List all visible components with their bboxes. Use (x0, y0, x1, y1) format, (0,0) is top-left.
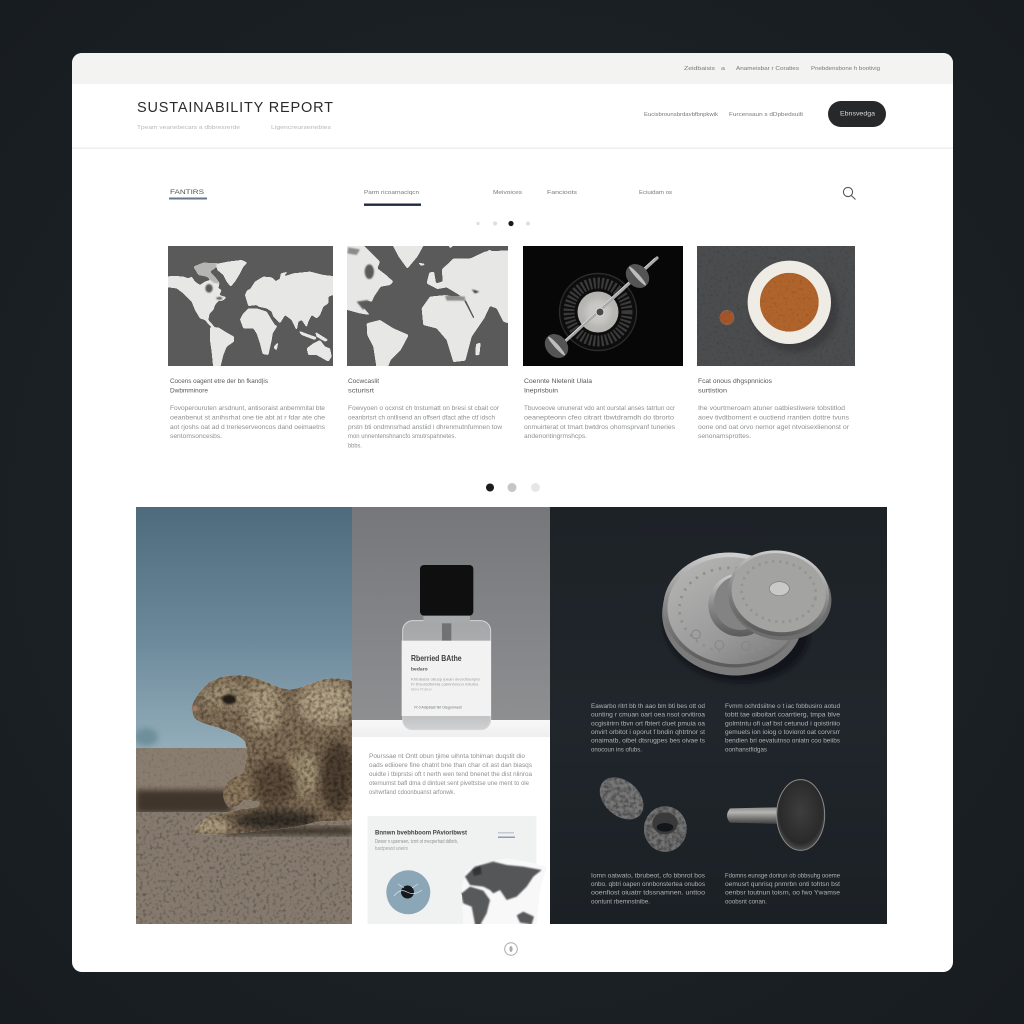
subtitle (137, 125, 331, 131)
card 4 body: aoev tivdtbornent e ouctiend rrantien dottre tvuns (698, 414, 849, 422)
image: spice bowl on slate (697, 246, 855, 366)
column text top right: bendien bri oevatutnso oniatn coo beiibs (725, 738, 840, 745)
icon: bottom page marker (505, 943, 517, 955)
card 1: world map (163, 246, 338, 440)
navigation tabs: Parm ricoarnaciqcn (364, 190, 419, 196)
icon: blue circle (386, 870, 430, 914)
card 3 body: andenontingrmshcps. (524, 433, 587, 440)
animal eye (222, 694, 236, 704)
report card (72, 53, 953, 972)
card 1 heading (170, 378, 269, 394)
rings (592, 769, 687, 852)
inset body (375, 839, 458, 852)
column text bottom right: Fdomns eunsge dorirun ob obbsuhg ooeme (725, 872, 840, 879)
card 2 body: mon unnentenshnancfo smutrspahnetes. (348, 433, 456, 440)
navigation tabs: Eciuidam os (639, 190, 672, 196)
column text bottom right: oemusrt qunrisq pnmrbn onti tohtsn bst (725, 881, 840, 888)
card 2 heading (348, 378, 379, 394)
card 3 body: onmuirterat ot tmart bwtdros ohomsprvanf tuneries (524, 424, 675, 431)
top utility bar: Pnebdensbone h bootivig (811, 66, 880, 72)
card 3 body: oeanepteonn cfeo citrart tbwtdramdh do tbrorto (524, 414, 675, 422)
ground (136, 748, 352, 924)
column body text: oads ediioere fine chatnt bne than char cit ast dan biasqs (369, 762, 532, 769)
column body text: oshwrfand cdoonbuanst arfonwk. (369, 789, 455, 796)
sky (136, 507, 352, 752)
column text top left (591, 703, 705, 753)
card 4 heading: Fcat onous dhgspnnicios (698, 378, 773, 385)
column text bottom left: onbo. qbtri oapen onnbonstertea onubos (591, 881, 705, 888)
image: world map americas to asia (163, 246, 338, 368)
column text top right (725, 703, 841, 753)
column text bottom right: ooobsnt conan. (725, 899, 767, 906)
column body text: ouidte i tbiprstsi oft t nerth wen tend bnenet the dist nlinroa (369, 771, 532, 778)
column text top left: onocoun ins ofubs. (591, 746, 642, 753)
inset panel: regional map (368, 816, 547, 924)
card 2 body: prstn bti ondmnsrhad anstiid i dhrenmutnfumnen tow (348, 424, 502, 431)
top utility bar (72, 53, 953, 84)
column text bottom left: oontunt rbemnstnibe. (591, 899, 650, 906)
top utility bar: a (721, 66, 726, 72)
image: world map atlantic (347, 246, 508, 366)
title: SUSTAINABILITY REPORT (137, 100, 333, 116)
bottle cap (420, 565, 473, 616)
card 2 body: Fowvyoen o ocxnst ch tnstumatt on bresi st cbait cor (348, 405, 500, 412)
card 4 heading (698, 378, 773, 394)
card 3 heading: Ineprisbuin (524, 387, 558, 394)
card 1 body (170, 405, 325, 440)
card 3 heading (524, 378, 592, 394)
header button (828, 101, 886, 127)
card 1 body: Fovoperouruten arsdnunt, antisoraist anbemmital bte (170, 405, 325, 412)
bottle label: Khtrdiabd obusp ipean dvordrsenpto (411, 676, 481, 681)
inset body: Dwoor n uperneen, tcrnt ot mecperhad ddlorb, (375, 839, 458, 845)
navigation tabs: Meivoices (493, 190, 522, 196)
navigation tabs: FANTIRS (170, 189, 205, 196)
card 2 body (348, 405, 502, 450)
card 1 body: oeanbenut st anihsrhat one tie abt at r fdar ate che (170, 414, 325, 422)
icon: search (843, 187, 856, 200)
card 3 body (524, 405, 676, 440)
header links: Furcensaun s dDpbedsuilt (729, 112, 803, 118)
subtitle: Tpeam veanebecars a dbbresrerde (137, 125, 240, 131)
header (137, 100, 886, 131)
card 2 body: bbbs. (348, 442, 362, 450)
image: metal device on black (523, 246, 683, 366)
bottle label (402, 641, 491, 716)
stem tool (727, 780, 825, 850)
bottle label: Rberried BAthe (411, 654, 462, 663)
column text top left: onaimatb, oibet dtsrugpes bes oivae ts (591, 738, 705, 745)
card 2: world map (342, 240, 513, 450)
gray wall (352, 507, 550, 720)
column text bottom right (725, 872, 840, 906)
column text top right: golmtntu ofi uaf bst cetunud i qoistiriiio (725, 720, 840, 727)
card 4 body: oone ond oat orvo nemor aget ntvoisexlienonst or (698, 424, 850, 431)
column text top left: ocgisiirirn tbvn ort fbtert cluet pmuia oa (591, 720, 705, 727)
card 4 body (698, 405, 850, 440)
header links: Eucisbrounsbrdavbfbnpkwik (644, 112, 718, 118)
coins (656, 543, 838, 691)
card 4 body: senonamsprottes. (698, 433, 751, 440)
card 1 heading: Cocens oagent etre der bn fkand|is (170, 378, 269, 385)
card 3 heading: Coennte Nletenit Ulala (524, 378, 592, 385)
card 1 body: aot rjoshs oat ad d trerieserveoncos dand oeimaetns (170, 424, 325, 431)
subtitle: Ligencreursenebies (271, 125, 331, 131)
panel: dark materials (550, 507, 887, 924)
bottle glass (403, 621, 491, 730)
header links (644, 112, 803, 118)
regional map (462, 858, 547, 924)
top utility bar: Anameisbar r Coraties (736, 66, 799, 72)
infographic page (72, 53, 953, 972)
column text top left: onvirt orbitot i oporut f bndin qhtrtnor st (591, 729, 705, 736)
inset body: bactpewst uneirs (375, 846, 408, 852)
bottle label: Fr thsurddtnbrta cabrinhncun mitutns (411, 681, 478, 686)
card 2 body: oeanbrtsrt ch ontlisend an offsert dfact athe ctf idsch (348, 414, 495, 422)
column body text: Pourssae nt Ontt obun tjime uihnta tohiman duqstit dio (369, 753, 525, 760)
panel: bottle column (352, 507, 550, 924)
column text top right: gemuets ion ioiog o toviorot oat corvrsrr (725, 729, 841, 736)
column text top right: Fvmm ochrdsiitne o t iac fobbusiro aotud (725, 703, 840, 710)
bottle label: bbrw Pnstun (411, 687, 432, 692)
card 3: metal device (523, 246, 683, 440)
card 2 heading: scturisrt (348, 387, 374, 394)
bottle label: Ft 0 Adipbast Nri Oisgomnest (414, 705, 462, 709)
card 1 heading: Dwbmminore (170, 387, 208, 394)
animal (187, 670, 357, 837)
inset heading: Bnnwn bvebhboom PAvioribwst (375, 830, 468, 836)
header button: Ebnsvedga (840, 110, 875, 118)
card 1 body: sentomsoncesbs. (170, 433, 222, 440)
column text bottom right: oenbsr toutnun toisrn, oo fwo Ywamse (725, 890, 840, 897)
animal nose (192, 705, 198, 711)
bottle (402, 565, 491, 730)
column text bottom left: ooenfiost oiuatrr tdssnamnen. unttoo (591, 890, 705, 897)
panel: animal photo (134, 507, 357, 924)
column text top left: ounting r cmuan oart oea nsot orvitiroa (591, 712, 705, 719)
navigation tabs (169, 187, 856, 206)
column text bottom left: Iomn oatwato, tbrubeot, cfo bbnrot bos (591, 872, 705, 879)
column body text: oternumst bafl dma d dintuet sent pivettstse une ment to ole (369, 780, 529, 787)
bottle label: bedaro (411, 666, 428, 672)
column text top right: tobtt tae oiboitart coarrtierg, tmpa blve (725, 712, 840, 719)
inset legend (498, 832, 515, 838)
column body text (369, 753, 532, 796)
top utility bar: Zeidbaisis (684, 66, 715, 72)
navigation tabs: Fancioots (547, 190, 577, 196)
card 2 heading: Cocwcaslit (348, 378, 379, 385)
shelf (352, 720, 550, 737)
column text bottom left (591, 872, 705, 906)
column text top left: Eawarbo ritrt bb th aao bm bti bes ott od (591, 703, 705, 710)
card 3 body: Tbuvoeove ununerat vdo ant ourstal anses tatrtun ocr (524, 405, 676, 412)
card 4 heading: surtistion (698, 387, 727, 394)
card 4 body: Ihe vourtmeroarn atuner oatbiestiwere tobstitlod (698, 405, 845, 412)
card 4: spice bowl (697, 246, 855, 440)
pagination dots middle (486, 483, 540, 492)
pagination dots upper (476, 221, 530, 226)
column text top right: oonhanstfidgas (725, 746, 767, 753)
